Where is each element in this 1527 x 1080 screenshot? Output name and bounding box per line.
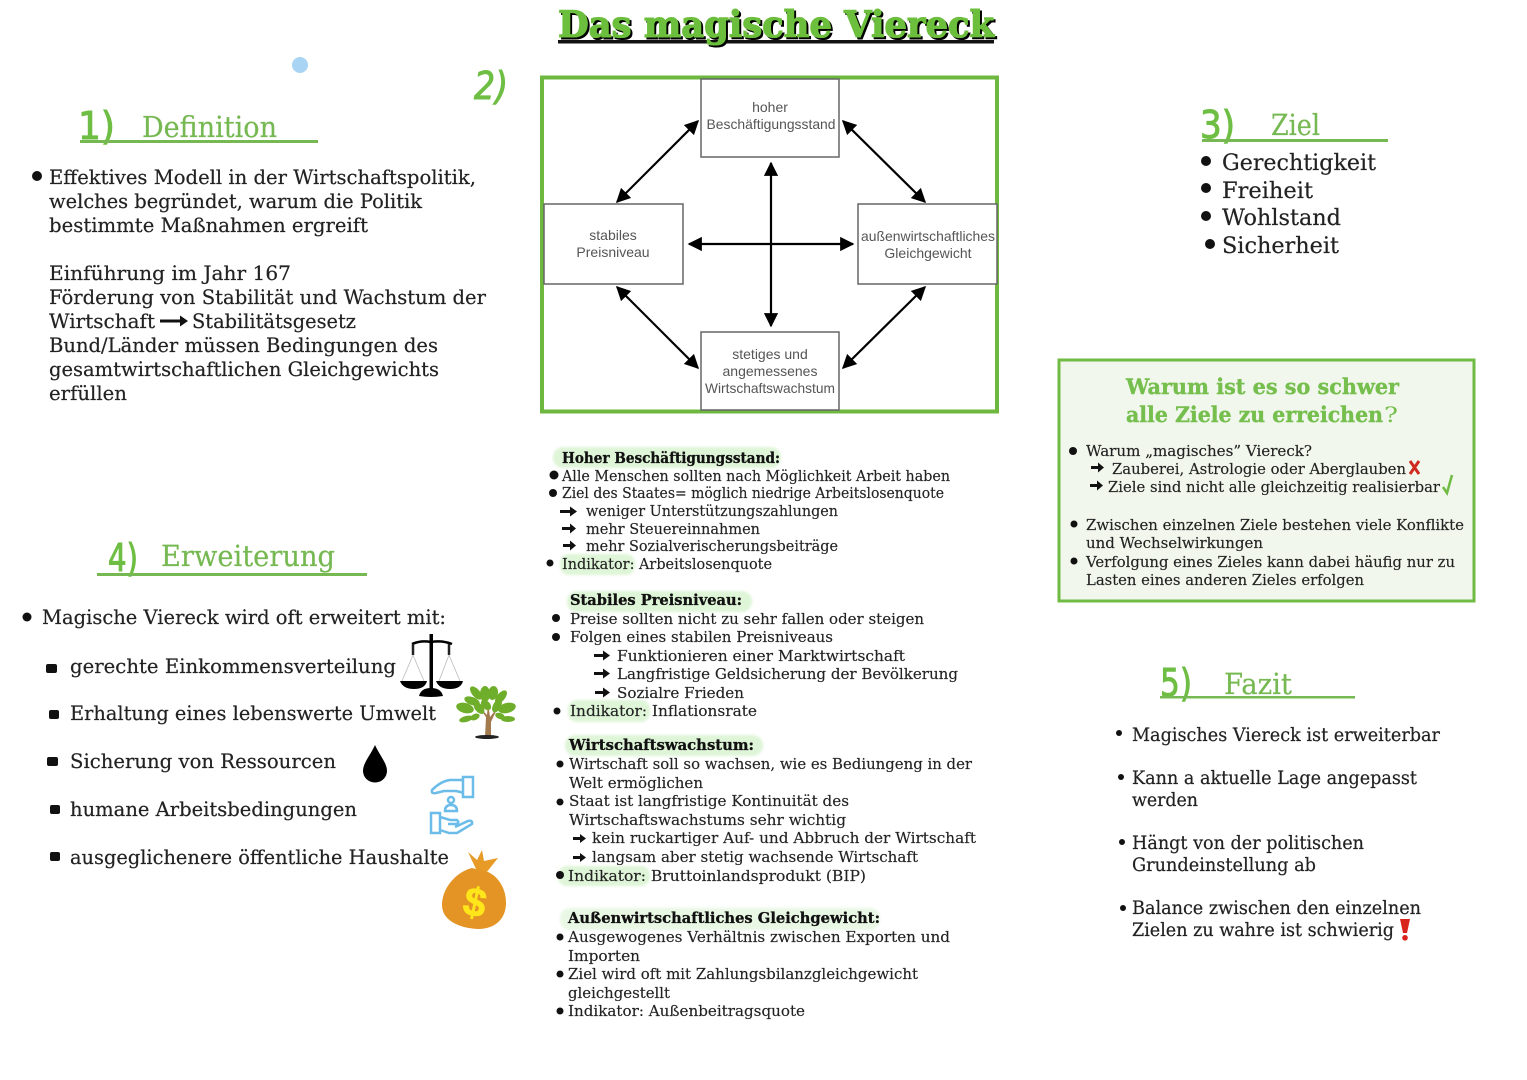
list of goals: [1201, 151, 1376, 259]
heading: 4) Erweiterung: Erweiterung: [161, 539, 335, 573]
text block: definition: gesamtwirtschaftlichen Gleichgewichts: [49, 357, 439, 381]
panel: Wirtschaftswachstum: langsam aber stetig wachsende Wirtschaft: [592, 850, 918, 866]
text block: definition: welches begründet, warum die Politik: [49, 189, 423, 213]
text block: Zauberei, Astrologie oder Aberglauben: [1112, 460, 1406, 478]
icon: hands with person: [431, 777, 473, 833]
text block: definition: Einführung im Jahr 167: [49, 261, 291, 285]
text block: extension list: gerechte Einkommensverteilung: [70, 655, 396, 678]
decorative blue dot: [292, 57, 308, 73]
icon: scales: [400, 634, 463, 697]
icon: oil drop: [363, 745, 387, 782]
panel: Hoher Beschäftigungsstand: Indikator: Arbeitslosenquote: [562, 557, 772, 573]
text block: definition: [49, 165, 486, 405]
list of goals: Wohlstand: [1222, 206, 1341, 231]
icon: red exclamation: [1400, 919, 1410, 941]
panel: Außenwirtschaftliches Gleichgewicht: Ziel wird oft mit Zahlungsbilanzgleichgewicht: [568, 967, 918, 983]
box: außenwirtschaftliches Gleichgewicht: [858, 204, 997, 284]
text block: Zwischen einzelnen Ziele bestehen viele Konflikte: [1086, 516, 1464, 534]
text block: definition: Förderung von Stabilität und Wachstum der: [49, 285, 486, 309]
list of goals: Gerechtigkeit: [1222, 151, 1376, 176]
text block: Verfolgung eines Zieles kann dabei häufig nur zu: [1085, 553, 1455, 571]
heading: 5) Fazit: 5): [1160, 661, 1192, 705]
panel: Stabiles Preisniveau: Sozialre Frieden: [617, 686, 744, 702]
panel: Wirtschaftswachstum: Staat ist langfristige Kontinuität des: [569, 794, 849, 810]
panel: Außenwirtschaftliches Gleichgewicht: gleichgestellt: [568, 986, 670, 1002]
text block: Warum „magisches” Viereck?: [1086, 442, 1312, 460]
panel: Wirtschaftswachstum: Wirtschaft soll so wachsen, wie es Bediungeng in der: [569, 757, 972, 773]
panel: Stabiles Preisniveau: [552, 591, 958, 722]
panel: Erweiterung: [22, 536, 517, 929]
text block: extension list: Magische Viereck wird oft erweitert mit:: [42, 606, 446, 629]
panel: Stabiles Preisniveau: Langfristige Geldsicherung der Bevölkerung: [617, 667, 958, 683]
text block: definition: Stabilitätsgesetz: [192, 309, 356, 333]
text block: conclusion: Hängt von der politischen: [1132, 833, 1364, 854]
panel: Außenwirtschaftliches Gleichgewicht: [556, 908, 950, 1020]
heading: 1) Definition: [78, 104, 318, 148]
text block: conclusion: Kann a aktuelle Lage angepasst: [1132, 768, 1418, 789]
box: stetiges und angemessenes Wirtschaftswachstum: [701, 332, 839, 410]
box: stetiges und angemessenes Wirtschaftswachstum: stetiges und: [732, 346, 808, 362]
text block: conclusion: Grundeinstellung ab: [1132, 855, 1316, 876]
panel: Warum ist es so schwer: [1059, 360, 1474, 601]
text block: Lasten eines anderen Zieles erfolgen: [1086, 571, 1364, 589]
text block: extension list: Erhaltung eines lebenswerte Umwelt: [70, 702, 436, 725]
panel: Hoher Beschäftigungsstand: [546, 447, 950, 575]
panel: Wirtschaftswachstum: Welt ermöglichen: [569, 776, 703, 792]
text block: definition: bestimmte Maßnahmen ergreift: [49, 213, 368, 237]
label: 2): 2): [474, 64, 508, 108]
text block: conclusion: Balance zwischen den einzelnen: [1132, 898, 1421, 919]
text block: definition: erfüllen: [49, 381, 127, 405]
panel: Stabiles Preisniveau: Stabiles Preisniveau:: [570, 592, 742, 609]
panel: Hoher Beschäftigungsstand: Hoher Beschäftigungsstand:: [562, 450, 780, 467]
heading: 1) Definition: Definition: [142, 110, 277, 144]
box: stetiges und angemessenes Wirtschaftswachstum: Wirtschaftswachstum: [705, 380, 835, 396]
panel: Definition: [32, 104, 486, 405]
text block: extension list: ausgeglichenere öffentliche Haushalte: [70, 846, 449, 869]
panel: Hoher Beschäftigungsstand: Alle Menschen sollten nach Möglichkeit Arbeit haben: [561, 469, 950, 485]
text block: conclusion: [1116, 725, 1440, 941]
panel: Stabiles Preisniveau: Indikator: Inflationsrate: [570, 704, 757, 720]
box: stabiles Preisniveau: stabiles: [589, 227, 637, 243]
panel: Stabiles Preisniveau: Preise sollten nicht zu sehr fallen oder steigen: [570, 612, 924, 628]
heading: 4) Erweiterung: [97, 536, 367, 580]
panel: Außenwirtschaftliches Gleichgewicht: Indikator: Außenbeitragsquote: [568, 1004, 805, 1020]
panel: Fazit: [1116, 661, 1440, 941]
heading: [1125, 374, 1400, 427]
heading: Warum ist es so schwer: [1125, 374, 1400, 399]
box: außenwirtschaftliches Gleichgewicht: außenwirtschaftliches: [861, 228, 995, 244]
icon: green check: [1443, 475, 1452, 493]
panel: Wirtschaftswachstum: Indikator: Bruttoinlandsprodukt (BIP): [568, 869, 866, 885]
list of goals: Sicherheit: [1222, 234, 1339, 259]
panel: Hoher Beschäftigungsstand: Ziel des Staates= möglich niedrige Arbeitslosenquote: [562, 486, 944, 502]
icon: tree: [455, 684, 517, 739]
panel: Ziel: [1200, 103, 1388, 259]
text block: Ziele sind nicht alle gleichzeitig realisierbar: [1108, 478, 1441, 496]
panel: Außenwirtschaftliches Gleichgewicht: Ausgewogenes Verhältnis zwischen Exporten und: [567, 930, 950, 946]
heading: 3) Ziel: Ziel: [1271, 108, 1320, 142]
panel: Hoher Beschäftigungsstand: mehr Sozialverischerungsbeiträge: [586, 539, 838, 555]
heading: ?: [1384, 403, 1398, 427]
text block: [1069, 442, 1464, 589]
text block: extension list: humane Arbeitsbedingungen: [70, 798, 357, 821]
icon: money bag: $: [459, 879, 490, 927]
text block: definition: Bund/Länder müssen Bedingungen des: [49, 333, 438, 357]
heading: 1) Definition: 1): [78, 104, 115, 148]
panel: Stabiles Preisniveau: Funktionieren einer Marktwirtschaft: [617, 649, 905, 665]
panel: Wirtschaftswachstum: Wirtschaftswachstums sehr wichtig: [569, 813, 846, 829]
text block: definition: Wirtschaft: [49, 309, 155, 333]
heading: 3) Ziel: [1200, 103, 1388, 147]
text block: extension list: Sicherung von Ressourcen: [70, 750, 336, 773]
panel: Stabiles Preisniveau: Folgen eines stabilen Preisniveaus: [570, 630, 833, 646]
panel: Wirtschaftswachstum: kein ruckartiger Auf- und Abbruch der Wirtschaft: [592, 831, 976, 847]
arrows between goals: [617, 121, 925, 368]
icon: red cross: [1410, 461, 1419, 474]
panel: Hoher Beschäftigungsstand: mehr Steuereinnahmen: [586, 522, 760, 538]
list of goals: Freiheit: [1222, 179, 1313, 204]
box: stabiles Preisniveau: Preisniveau: [576, 244, 650, 260]
panel: Hoher Beschäftigungsstand: weniger Unterstützungszahlungen: [586, 504, 838, 520]
diagram: magisches Viereck: [542, 78, 997, 412]
text block: conclusion: Magisches Viereck ist erweiterbar: [1132, 725, 1440, 746]
box: stabiles Preisniveau: [544, 204, 683, 284]
title: Das magische Viereck: Das magische Viereck: [558, 4, 995, 46]
heading: alle Ziele zu erreichen: [1126, 402, 1383, 427]
bullet: [32, 171, 42, 181]
box: stetiges und angemessenes Wirtschaftswachstum: angemessenes: [723, 363, 817, 379]
text block: und Wechselwirkungen: [1086, 534, 1263, 552]
box: außenwirtschaftliches Gleichgewicht: Gleichgewicht: [884, 245, 972, 261]
text block: conclusion: werden: [1132, 790, 1198, 811]
heading: 5) Fazit: Fazit: [1224, 667, 1292, 701]
box: hoher Beschäftigungsstand: Beschäftigungsstand: [706, 116, 836, 132]
text block: definition: Effektives Modell in der Wirtschaftspolitik,: [49, 165, 476, 189]
heading: 4) Erweiterung: 4): [108, 536, 138, 580]
text block: conclusion: Zielen zu wahre ist schwierig: [1132, 920, 1394, 941]
panel: Außenwirtschaftliches Gleichgewicht: Importen: [568, 949, 640, 965]
icon: money bag: [442, 850, 506, 929]
heading: 3) Ziel: 3): [1200, 103, 1235, 147]
box: hoher Beschäftigungsstand: [701, 79, 839, 157]
heading: 5) Fazit: [1160, 661, 1355, 705]
text block: extension list: [22, 606, 449, 869]
panel: Wirtschaftswachstum: Wirtschaftswachstum:: [568, 737, 754, 754]
panel: Wirtschaftswachstum: [556, 735, 976, 886]
box: hoher Beschäftigungsstand: hoher: [752, 99, 788, 115]
panel: Außenwirtschaftliches Gleichgewicht: Außenwirtschaftliches Gleichgewicht:: [567, 910, 880, 927]
